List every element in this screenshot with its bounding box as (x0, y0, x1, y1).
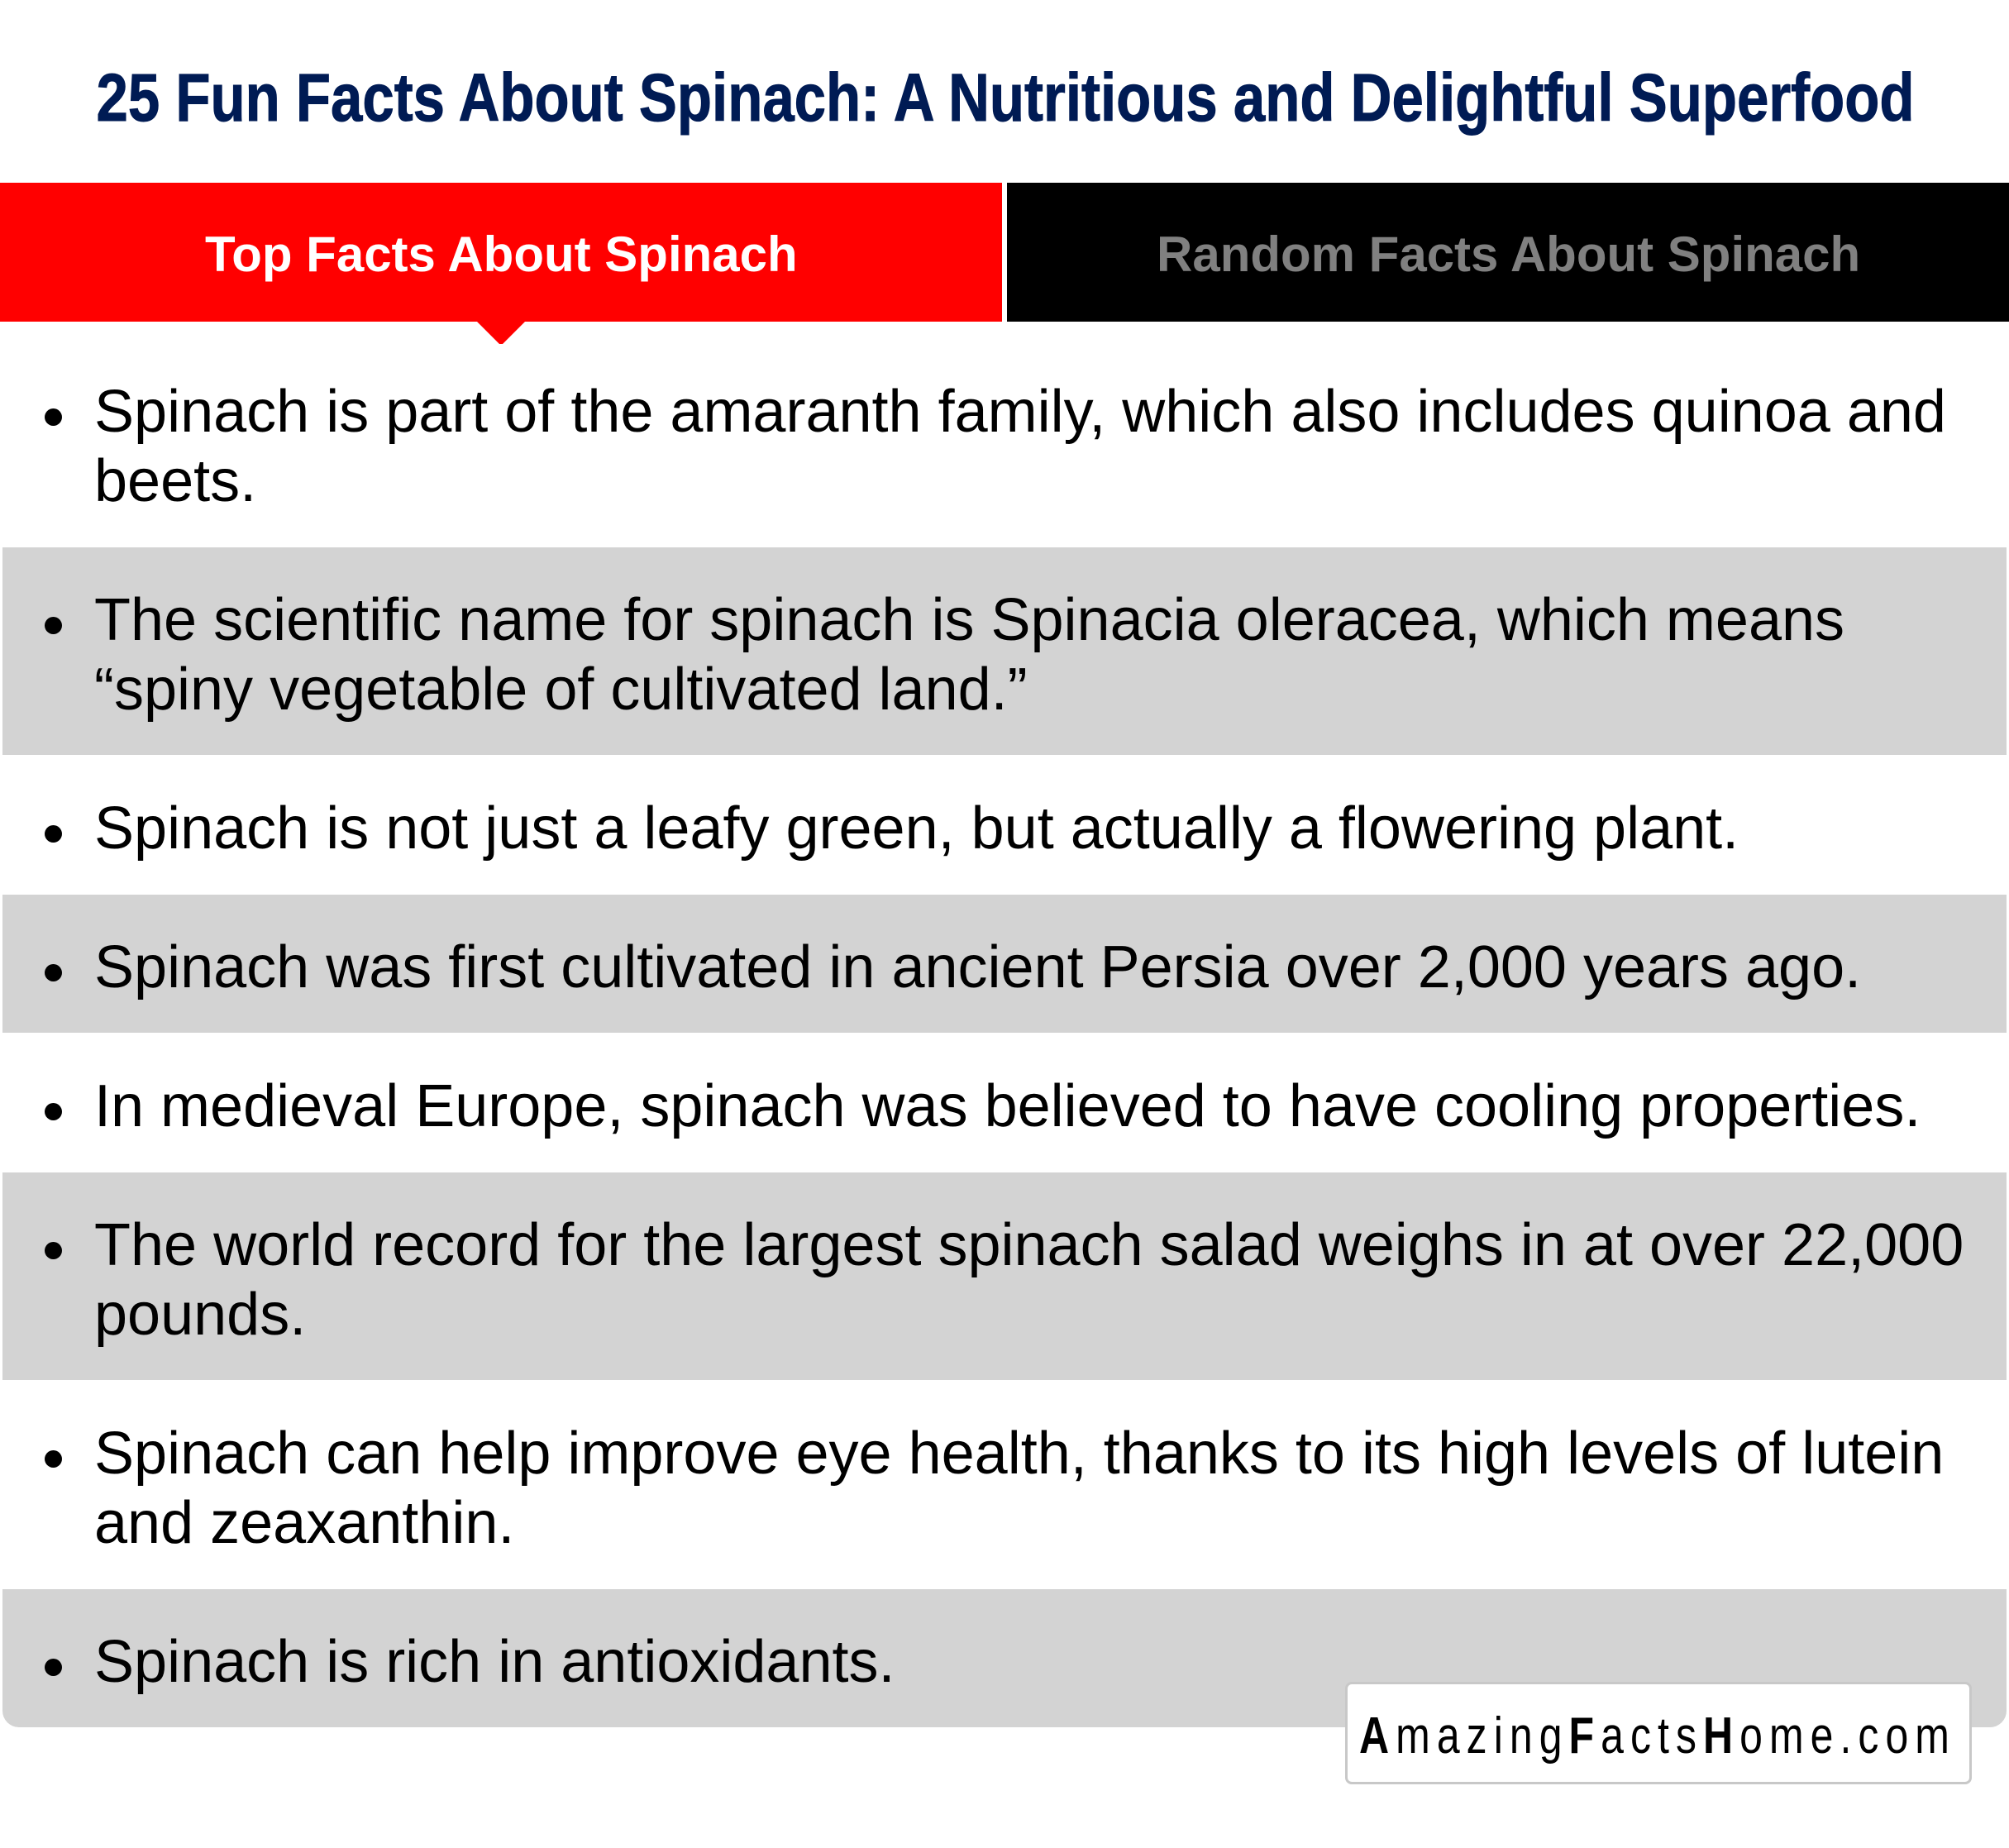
fact 5: In medieval Europe, spinach was believed to have cooling properties. (94, 1073, 1921, 1139)
tab label: top facts: Top Facts About Spinach (205, 227, 798, 282)
tab label: random facts: Random Facts About Spinach (1157, 227, 1860, 282)
fact 1: beets. (94, 448, 256, 514)
tab pointer (477, 322, 525, 344)
fact 1: Spinach is part of the amaranth family, which also includes quinoa and (94, 379, 1946, 445)
fact 6: The world record for the largest spinach salad weighs in at over 22,000 (94, 1212, 1964, 1278)
fact 1 (45, 379, 1946, 514)
fact 6: pounds. (94, 1282, 306, 1348)
fact 7: and zeaxanthin. (94, 1490, 514, 1556)
fact 2: The scientific name for spinach is Spinacia oleracea, which means (94, 587, 1844, 653)
fact 7: Spinach can help improve eye health, thanks to its high levels of lutein (94, 1421, 1944, 1487)
fact 8: Spinach is rich in antioxidants. (94, 1629, 895, 1695)
fact 6 (2, 1172, 2007, 1380)
fact 8 (2, 1589, 2007, 1727)
tab: random facts (1007, 183, 2009, 322)
fact 3: Spinach is not just a leafy green, but actually a flowering plant. (94, 795, 1739, 862)
fact 2: “spiny vegetable of cultivated land.” (94, 657, 1028, 723)
fact 4: Spinach was first cultivated in ancient Persia over 2,000 years ago. (94, 934, 1861, 1000)
fact 7 (45, 1421, 1944, 1556)
fact 2 (2, 547, 2007, 755)
fact 4 (2, 895, 2007, 1033)
tab: top facts (active) (0, 183, 1002, 322)
watermark logo (1345, 1682, 1972, 1784)
